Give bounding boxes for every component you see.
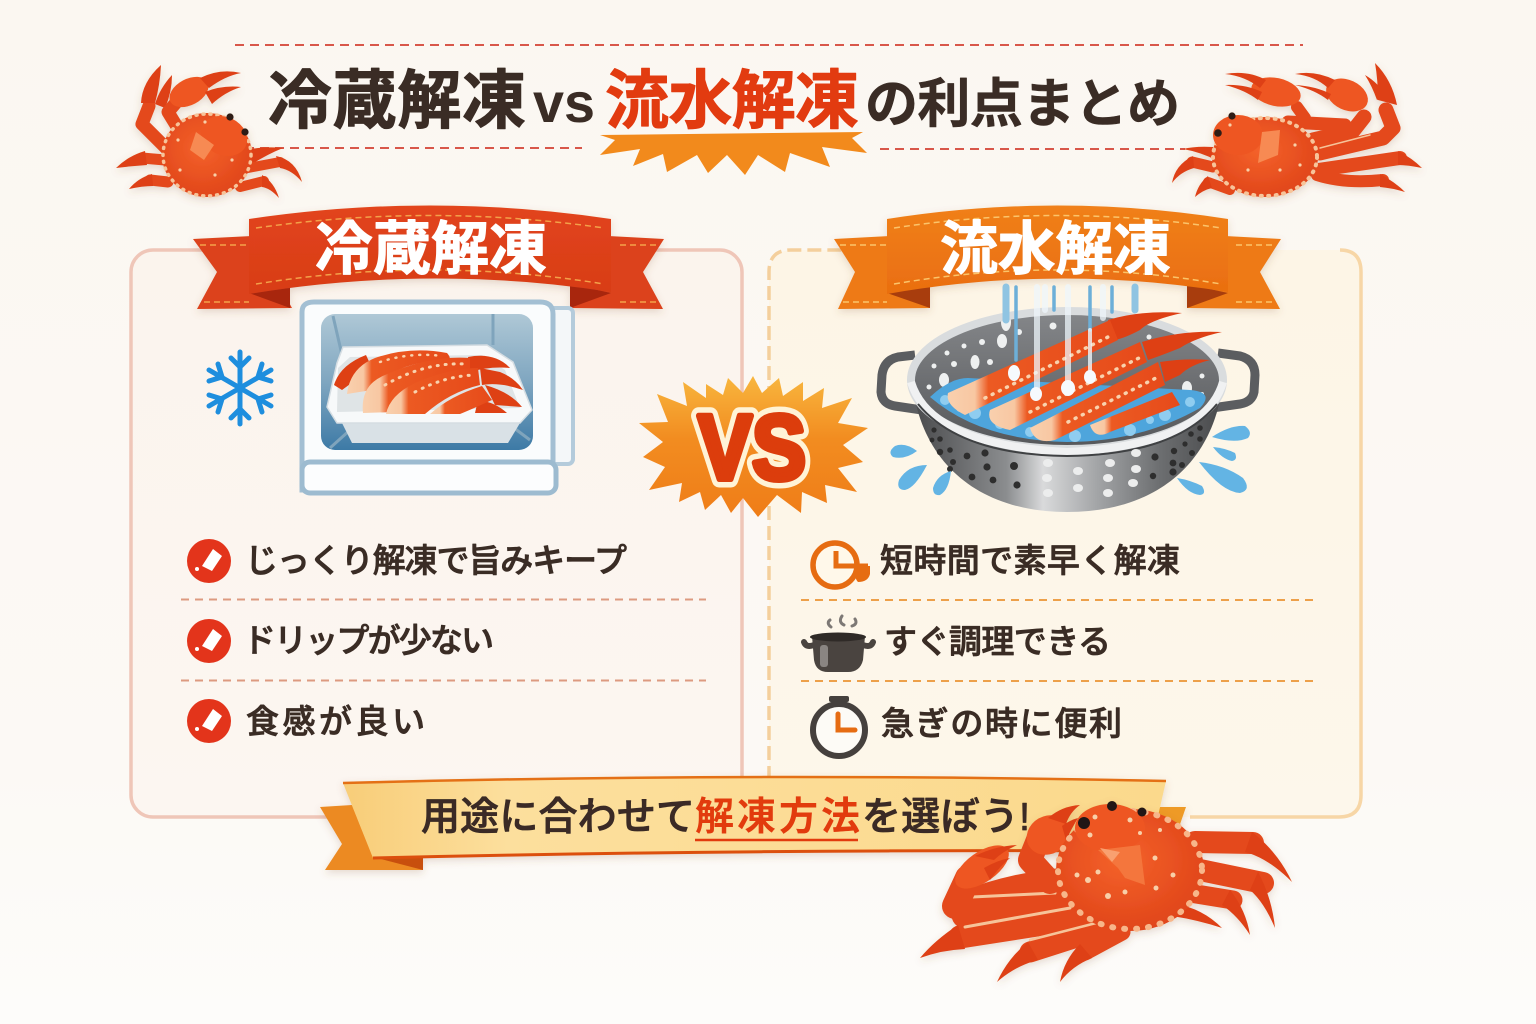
outer holes	[930, 425, 1203, 489]
illustration: colander with running water	[881, 287, 1255, 512]
ribbon label: 流水解凍	[940, 217, 1171, 282]
list item: 食感が良い	[246, 703, 425, 740]
water in bowl	[930, 378, 1206, 442]
title: vs: vs	[533, 71, 595, 134]
illustration: refrigerator with crab legs	[302, 302, 573, 493]
inner holes	[926, 313, 1204, 396]
banner text: 用途に合わせて	[421, 796, 695, 839]
list item: 短時間で素早く解凍	[880, 542, 1180, 579]
rim back	[911, 311, 1223, 449]
right list	[801, 542, 1318, 756]
icon: stopwatch	[813, 696, 865, 756]
VS starburst badge	[639, 376, 868, 517]
panel: 冷蔵解凍	[131, 250, 742, 817]
title block	[235, 45, 1303, 175]
tray	[342, 423, 520, 443]
panel: 流水解凍	[769, 250, 1361, 817]
crab legs in colander	[948, 312, 1222, 441]
water drops	[890, 426, 1250, 495]
crab legs in tray	[334, 350, 523, 414]
icon: marker 3	[187, 699, 231, 743]
crab: bottom large	[920, 801, 1292, 982]
rim front	[911, 382, 1223, 452]
VS halo: VS	[698, 397, 806, 499]
list item: すぐ調理できる	[884, 623, 1111, 660]
icon: snowflake	[209, 352, 271, 424]
bottom banner	[320, 777, 1186, 870]
VS label: VS	[698, 397, 806, 499]
ribbon: 流水解凍	[834, 206, 1281, 309]
icon: marker 1	[187, 539, 231, 583]
handles	[881, 355, 922, 410]
crab: top right	[1172, 63, 1422, 197]
list item: 急ぎの時に便利	[881, 705, 1122, 742]
icon: pot	[804, 616, 873, 672]
title: 冷蔵解凍: 冷蔵解凍	[268, 65, 526, 137]
large claws	[1030, 840, 1050, 882]
ribbon: 冷蔵解凍	[193, 206, 664, 309]
starburst under title	[600, 132, 867, 175]
body	[1056, 809, 1204, 931]
bowl	[915, 400, 1220, 512]
ribbon label: 冷蔵解凍	[315, 217, 547, 282]
water streams	[1006, 287, 1135, 395]
title: の利点まとめ: の利点まとめ	[865, 75, 1180, 134]
icon: marker 2	[187, 619, 231, 663]
title: 流水解凍: 流水解凍	[605, 65, 859, 137]
icon: clock	[813, 543, 870, 587]
banner text end: を選ぼう!	[862, 796, 1030, 839]
left list	[181, 539, 706, 743]
banner highlight: 解凍方法	[695, 796, 860, 839]
list item: ドリップが少ない	[243, 622, 494, 659]
list item: じっくり解凍で旨みキープ	[245, 542, 627, 579]
crab: top left	[116, 65, 302, 198]
